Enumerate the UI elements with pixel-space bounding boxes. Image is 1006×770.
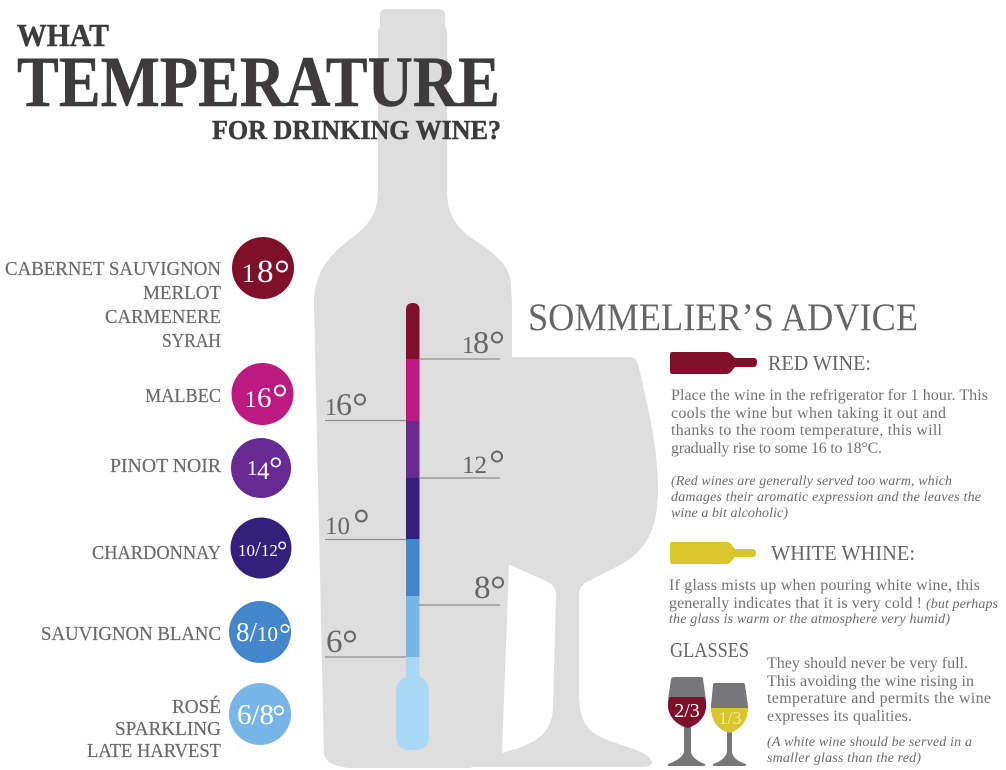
heading: glasses: GLASSES [670,638,749,662]
badge: 14 degrees: 1 [247,456,258,480]
badge: 6 to 8 degrees: 6/8 [237,699,274,731]
title line: what: WHAT [17,17,109,53]
label: sauvignon blanc: SAUVIGNON BLANC [41,623,221,645]
badge: 18 degrees: 1 [242,259,255,288]
badge: 6 to 8 degrees [229,683,291,745]
text block: white wine advice: (but perhaps [926,597,999,612]
badge: 14 degrees: 4 [257,458,270,485]
text block: white wine advice [669,577,999,627]
scale: 12: 12 [462,452,487,479]
wine varieties with temperature badges [5,237,294,762]
badge: 8 to 10 degrees [229,601,291,663]
heading: sommelier's advice: SOMMELIER’S ADVICE [528,296,918,339]
text block: red wine note: (Red wines are generally served too warm, which [671,474,952,489]
text block: glasses note [767,735,972,766]
label: red varieties [5,258,221,352]
text block: red wine note [671,474,981,521]
title line: temperature: TEMPERATURE [17,42,500,122]
icon: red wine glass two thirds full [668,677,706,766]
badge: 10 to 12 degrees: ° [277,536,287,565]
label: red varieties: MERLOT [143,282,221,304]
label: pinot noir: PINOT NOIR [110,455,222,477]
text block: red wine note: wine a bit alcoholic) [671,506,788,521]
section heading: red wine: RED WINE: [768,351,871,375]
label: rose, sparkling, late harvest: SPARKLING [115,718,221,740]
scale: 16: ° [352,384,368,429]
text block: red wine advice: Place the wine in the refrigerator for 1 hour. This [671,387,988,404]
label: rose, sparkling, late harvest: LATE HARVEST [87,740,221,762]
badge: 16 degrees: 6 [257,382,272,414]
label: red varieties: SYRAH [162,330,221,352]
badge: 14 degrees: ° [269,451,283,488]
label: rose, sparkling, late harvest: ROSÉ [172,695,221,718]
icon: white wine glass one third full: 1/3 [718,708,742,728]
badge: 6 to 8 degrees: ° [272,699,286,736]
scale: 12: ° [489,441,505,486]
text block: glasses note: smaller glass than the red) [767,751,921,766]
text block: white wine advice: the glass is warm or the atmosphere very humid) [669,612,950,627]
text block: glasses advice: temperature and permits the wine [767,690,991,707]
badge: 10 to 12 degrees: 10/12 [238,537,278,561]
text block: white wine advice: generally indicates that it is very cold ! [669,595,922,612]
text block: glasses advice: expresses its qualities. [767,708,912,725]
scale: 18: ° [489,322,505,367]
badge: 16 degrees: 1 [245,387,256,412]
icon: white wine bottle [670,542,756,564]
badge: 10 to 12 degrees [230,518,292,578]
label: red varieties: CABERNET SAUVIGNON [5,258,221,280]
icon: red wine glass two thirds full: 2/3 [674,700,700,722]
label: malbec: MALBEC [145,385,221,407]
scale: 10: 10 [325,513,350,540]
icon: red wine bottle [670,352,757,374]
text block: red wine note: damages their aromatic expression and the leaves the [671,490,981,505]
text block: glasses advice [767,655,991,725]
title line: for drinking wine: FOR DRINKING WINE? [212,115,501,145]
scale: 8: 8 [474,570,490,606]
badge: 16 degrees: ° [272,375,288,420]
wine glass silhouette [470,357,658,767]
scale: 10: ° [353,502,370,548]
label: rose, sparkling, late harvest [87,695,221,762]
badge: 18 degrees [232,237,294,299]
badge: 18 degrees: ° [274,251,290,296]
badge: 8 to 10 degrees: ° [279,618,291,651]
text block: red wine advice: gradually rise to some 16 to 18°C. [671,440,882,457]
thermometer [396,303,429,750]
title [17,17,501,145]
bottle silhouette [314,9,520,768]
text block: red wine advice [671,387,988,457]
scale: 8: ° [490,567,506,612]
scale: 6: ° [342,621,358,666]
text block: glasses note: (A white wine should be served in a [767,735,972,750]
thermometer scale ticks and numbers [325,322,506,666]
text block: red wine advice: thanks to the room temperature, this will [671,422,943,439]
label: red varieties: CARMENERE [105,306,221,328]
text block: glasses advice: This avoiding the wine rising in [767,673,974,690]
badge: 8 to 10 degrees: 8/10 [236,617,278,647]
label: chardonnay: CHARDONNAY [92,542,221,564]
text block: glasses advice: They should never be very full. [767,655,968,672]
badge: 14 degrees [231,438,291,498]
section heading: white whine: WHITE WHINE: [771,541,915,565]
text block: red wine advice: cools the wine but when taking it out and [671,405,946,422]
badge: 18 degrees: 8 [257,254,274,290]
badge: 16 degrees [232,363,294,425]
text block: white wine advice: If glass mists up when pouring white wine, this [669,577,980,594]
scale: 6: 6 [326,624,342,660]
scale: 16: 6 [336,386,352,422]
scale: 16: 1 [325,395,337,421]
scale: 18: 8 [473,324,489,360]
icon: white wine glass one third full [711,683,748,766]
scale: 18: 1 [462,333,474,359]
